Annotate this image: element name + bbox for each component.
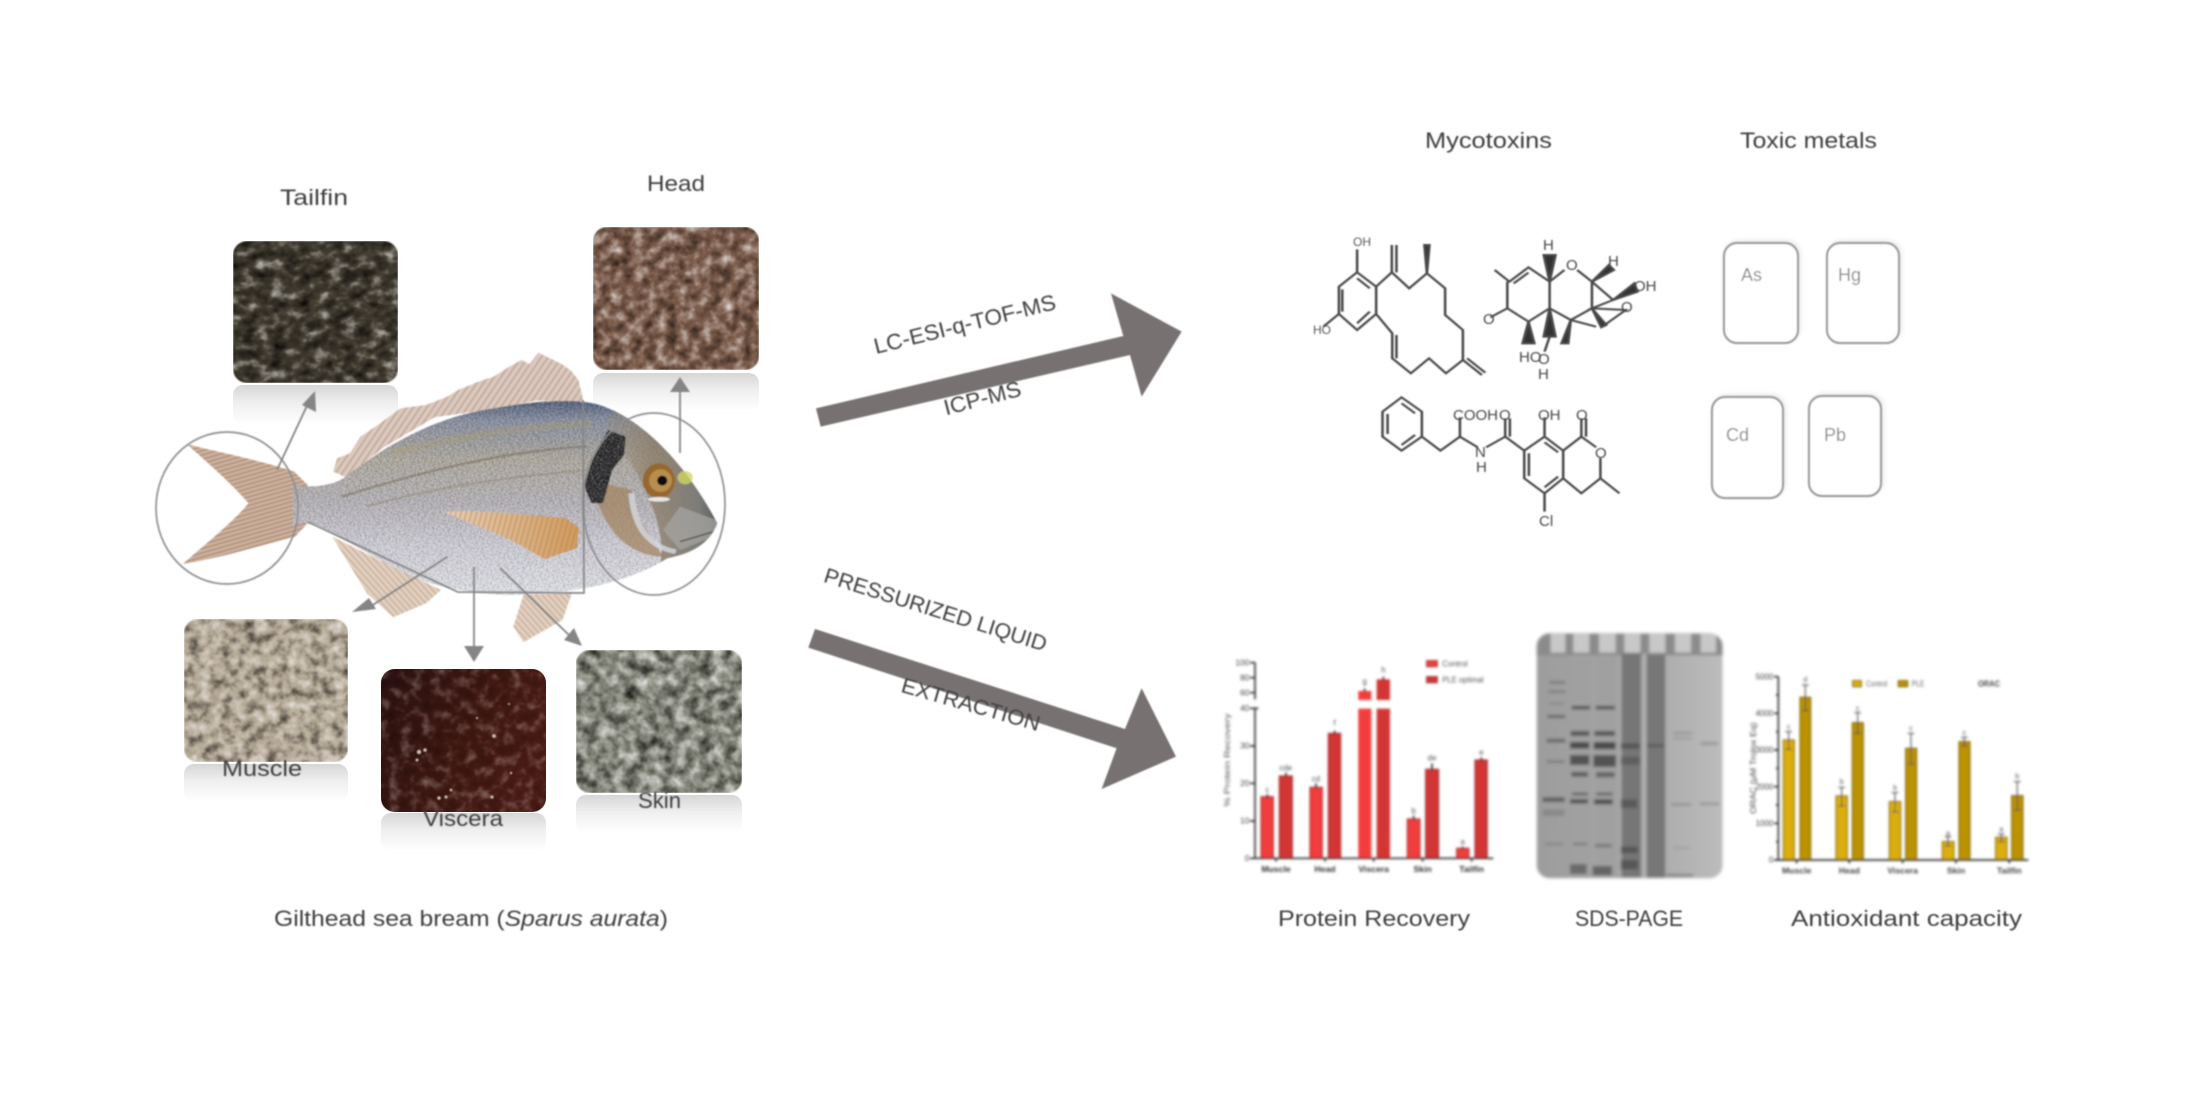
protein lanes bands xyxy=(1570,706,1719,877)
fish dark nape band xyxy=(584,430,626,503)
heading: Toxic metals: Toxic metals xyxy=(1740,128,1877,153)
molecule: deoxynivalenol: H xyxy=(1538,366,1549,383)
arrow: fish body to viscera sample xyxy=(464,567,484,662)
significance letters: f xyxy=(1334,718,1337,727)
molecule: deoxynivalenol: O xyxy=(1621,299,1633,316)
error bars and axes xyxy=(1250,663,1493,862)
sample: skin powder swatch xyxy=(576,650,742,833)
significance letters: d xyxy=(1803,675,1807,684)
molecule: ochratoxin A: OH xyxy=(1538,407,1560,424)
tick labels: 2000 xyxy=(1756,782,1774,791)
molecule: deoxynivalenol: O xyxy=(1566,257,1578,274)
tick labels: 30 xyxy=(1240,741,1250,751)
tick labels: 5000 xyxy=(1756,672,1774,681)
control bars xyxy=(1261,691,1469,858)
tick labels: 10 xyxy=(1240,816,1250,826)
significance letters: h xyxy=(1381,666,1386,675)
tick labels: 60 xyxy=(1240,687,1250,697)
infographic canvas xyxy=(154,131,2030,932)
category labels: Muscle xyxy=(1782,865,1812,875)
significance letters: cde xyxy=(1279,764,1293,773)
significance letters: a xyxy=(1999,824,2004,833)
tick labels: 40 xyxy=(1240,703,1250,713)
molecule: deoxynivalenol: HO xyxy=(1519,349,1542,366)
label: Head: Head xyxy=(647,171,705,196)
significance letters: g xyxy=(1362,677,1367,686)
metal tile: Cd: Cd xyxy=(1726,425,1749,445)
category labels: Viscera xyxy=(1358,864,1389,874)
significance letters: cd xyxy=(1312,774,1320,783)
label: Viscera: Viscera xyxy=(423,806,504,831)
metal tile: As: As xyxy=(1741,265,1762,285)
significance letters: c xyxy=(1962,728,1966,737)
gel: SDS-PAGE image xyxy=(1537,633,1723,878)
molecule: zearalenone: HO xyxy=(1313,323,1331,337)
significance letters: b xyxy=(1893,783,1897,792)
fish pectoral fin xyxy=(443,511,579,559)
molecule: ochratoxin A: COOH xyxy=(1453,407,1498,424)
heading: Mycotoxins: Mycotoxins xyxy=(1425,128,1552,153)
label: Skin: Skin xyxy=(638,788,681,813)
significance letters: c xyxy=(1909,724,1913,733)
selection ellipse: tail region xyxy=(156,432,298,584)
legend: ORAC xyxy=(1978,679,2001,689)
tick labels: 20 xyxy=(1240,778,1250,788)
significance letters: c xyxy=(1856,704,1860,713)
arrow: pressurized liquid extraction route xyxy=(808,564,1176,789)
arrow: fish body to muscle sample xyxy=(352,557,447,612)
molecule: deoxynivalenol: H xyxy=(1608,253,1619,270)
legend: Control xyxy=(1442,660,1468,669)
wells xyxy=(1551,634,1716,653)
fish dorsal fin xyxy=(333,353,584,477)
metal tile: Cd xyxy=(1712,395,1785,498)
arrow: fish head to head sample xyxy=(670,377,690,453)
molecule: deoxynivalenol: H xyxy=(1543,237,1554,254)
molecule: deoxynivalenol xyxy=(1483,237,1656,383)
molecule: deoxynivalenol: OH xyxy=(1634,278,1656,295)
caption: species name: Gilthead sea bream ( Sparus aurata ) xyxy=(274,906,668,931)
fish body xyxy=(293,401,717,595)
significance letters xyxy=(1265,666,1484,847)
chart: antioxidant capacity ORAC bar chart xyxy=(1749,672,2028,875)
fish eye xyxy=(643,463,675,502)
tick labels: 100 xyxy=(1235,657,1250,667)
molecule: zearalenone xyxy=(1313,235,1485,375)
label: Muscle: Muscle xyxy=(222,756,302,781)
PLE optimal bars xyxy=(1279,679,1487,858)
metal tile: Pb: Pb xyxy=(1824,425,1846,445)
fish illustration: gilthead sea bream xyxy=(183,353,722,642)
sample: tailfin powder swatch xyxy=(233,241,398,425)
legend: Control xyxy=(1866,680,1887,689)
tick labels: 0 xyxy=(1245,853,1250,863)
significance letters: de xyxy=(1428,754,1437,763)
significance letters: b xyxy=(1411,806,1416,815)
error bars and axes xyxy=(1785,685,2021,846)
tick labels xyxy=(1235,657,1250,863)
axis title: % Protein Recovery xyxy=(1222,712,1232,807)
control bars xyxy=(1783,740,2007,860)
tick labels: 3000 xyxy=(1756,746,1774,755)
category labels: Head xyxy=(1314,864,1336,874)
tick labels: 80 xyxy=(1240,672,1250,682)
molecule: deoxynivalenol: O xyxy=(1538,351,1550,368)
significance letters: e xyxy=(1479,748,1484,757)
arrow: fish body to skin sample xyxy=(500,568,582,646)
legend xyxy=(1853,679,2001,689)
caption: SDS-PAGE: SDS-PAGE xyxy=(1575,906,1683,931)
label: Tailfin: Tailfin xyxy=(280,185,348,210)
molecules: mycotoxin structures xyxy=(1313,235,1656,530)
fish anal fin xyxy=(332,537,441,617)
axis title: ORAC (μM Trolox Eq) xyxy=(1749,722,1758,814)
legend: PLE xyxy=(1912,680,1924,689)
arrow: fish tail to tailfin sample xyxy=(277,391,316,470)
fish ventral fin xyxy=(513,593,572,642)
tick labels: 1000 xyxy=(1756,819,1774,828)
molecule: ochratoxin A: H xyxy=(1476,459,1487,476)
label: EXTRACTION: EXTRACTION xyxy=(899,673,1043,736)
legend: PLE optimal xyxy=(1442,676,1484,685)
category labels: Muscle xyxy=(1261,864,1291,874)
caption: Protein Recovery: Protein Recovery xyxy=(1278,906,1470,931)
molecule: ochratoxin A: Cl xyxy=(1539,513,1553,530)
sample: viscera powder swatch xyxy=(381,669,546,851)
category labels: Skin xyxy=(1947,865,1965,875)
tick labels: 4000 xyxy=(1756,709,1774,718)
category labels: Viscera xyxy=(1887,865,1918,875)
significance letters: c xyxy=(1787,722,1791,731)
caption: Antioxidant capacity: Antioxidant capacity xyxy=(1791,906,2022,931)
outline traces over fish xyxy=(308,400,584,593)
molecule: deoxynivalenol: O xyxy=(1483,311,1495,328)
legend xyxy=(1427,660,1484,685)
significance letters: a xyxy=(1460,838,1465,847)
category labels xyxy=(1782,865,2022,875)
fish tail fin xyxy=(183,444,308,564)
fish gold forehead spot xyxy=(677,471,693,484)
metal tile: Hg xyxy=(1827,241,1901,343)
metal tile: Pb xyxy=(1809,394,1883,496)
category labels: Head xyxy=(1839,865,1860,875)
PLE bars xyxy=(1800,697,2023,860)
label: LC-ESI-q-TOF-MS: LC-ESI-q-TOF-MS xyxy=(871,289,1058,359)
molecule: ochratoxin A: O xyxy=(1499,407,1511,424)
label: ICP-MS: ICP-MS xyxy=(941,376,1024,420)
significance letters: c xyxy=(1265,786,1269,795)
selection ellipse: head region xyxy=(583,413,725,595)
molecule: ochratoxin A xyxy=(1383,397,1619,530)
molecule: ochratoxin A: O xyxy=(1595,445,1607,462)
fish body markings xyxy=(342,405,722,570)
significance letters: b xyxy=(1840,777,1844,786)
category labels: Skin xyxy=(1414,864,1432,874)
category labels xyxy=(1261,864,1484,874)
molecule: ochratoxin A: O xyxy=(1576,407,1588,424)
category labels: Tailfin xyxy=(1459,864,1484,874)
lane smears xyxy=(1622,653,1641,877)
label: PRESSURIZED LIQUID: PRESSURIZED LIQUID xyxy=(821,564,1050,656)
tick labels: 0 xyxy=(1769,856,1774,865)
chart: protein recovery bar chart xyxy=(1222,657,1493,874)
molecule: zearalenone: OH xyxy=(1353,235,1371,249)
tick labels xyxy=(1756,672,1774,865)
molecule: ochratoxin A: N xyxy=(1475,444,1486,461)
marker lane bands xyxy=(1543,681,1566,845)
significance letters: b xyxy=(2015,772,2019,781)
sample: head powder swatch xyxy=(593,227,759,411)
metal tile: Hg: Hg xyxy=(1838,265,1861,285)
sample: muscle powder swatch xyxy=(184,619,348,802)
significance letters: a xyxy=(1946,828,1951,837)
arrow: LC-ESI-q-TOF-MS / ICP-MS route xyxy=(816,289,1182,427)
metal tile: As xyxy=(1724,241,1800,343)
significance letters xyxy=(1787,675,2019,837)
category labels: Tailfin xyxy=(1997,865,2022,875)
